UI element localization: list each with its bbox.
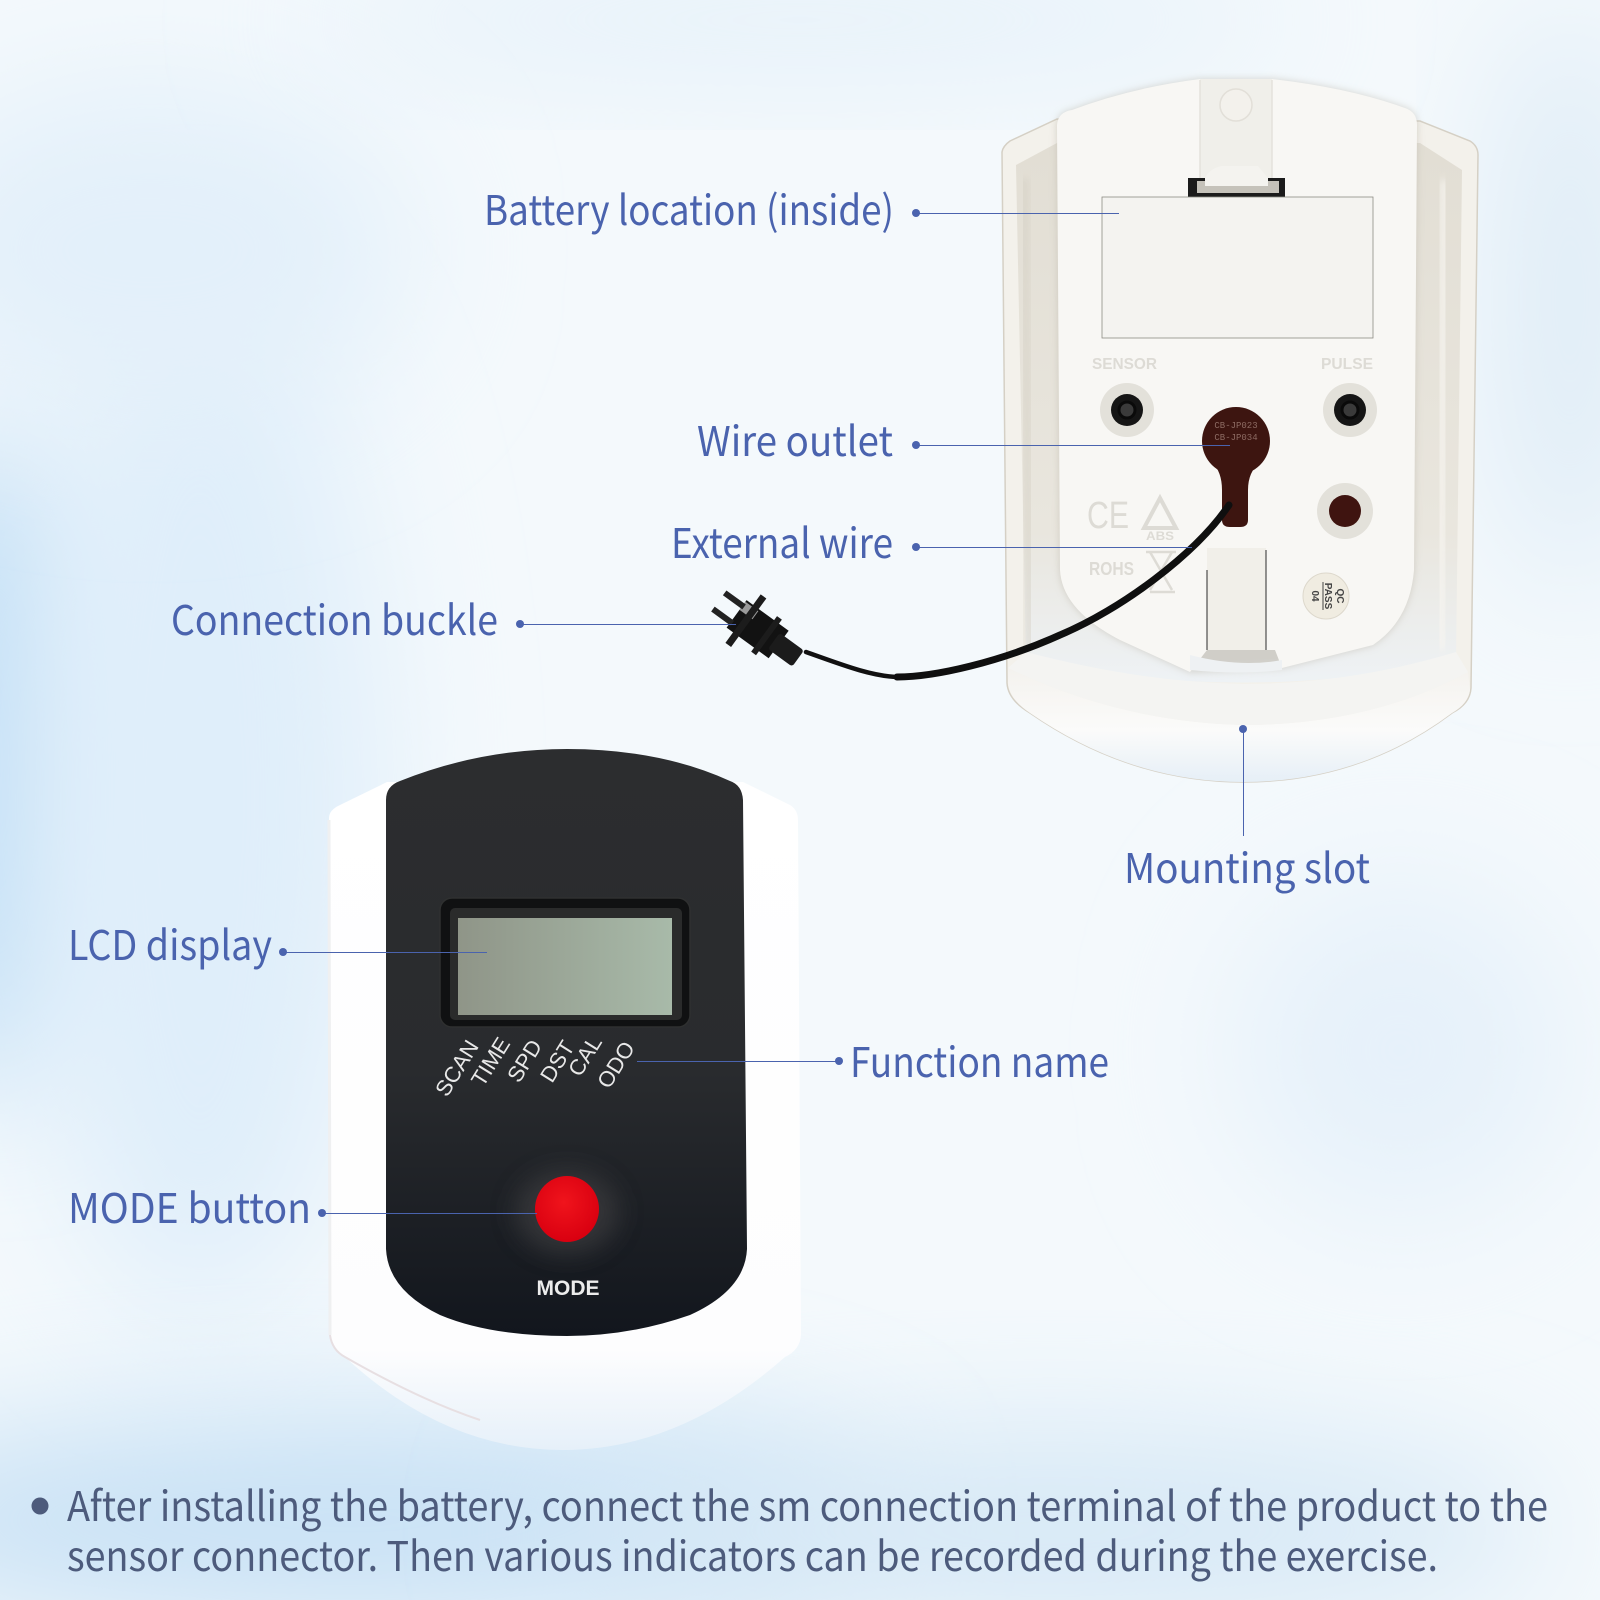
third hole [1317, 483, 1373, 539]
callout: external wire: External wire [671, 510, 893, 570]
external wire with connection buckle [701, 505, 1229, 683]
mounting notch [1190, 548, 1282, 672]
note: usage instructions [32, 1473, 1548, 1583]
callout: LCD display: LCD display [68, 912, 272, 972]
MODE button [515, 1170, 619, 1254]
QC pass sticker: QC [1334, 588, 1345, 604]
product: front view of the monitor [329, 749, 801, 1450]
callout: MODE button: MODE button [68, 1175, 311, 1235]
certification marks: ABS [1146, 529, 1174, 543]
callout: connection buckle [171, 587, 736, 647]
LCD bezel [440, 898, 690, 1027]
certification marks: ROHS [1089, 559, 1134, 579]
QC pass sticker: PASS [1322, 583, 1333, 610]
function names: DST [535, 1036, 580, 1087]
function names: SCAN [430, 1036, 484, 1101]
certification marks [1087, 495, 1176, 592]
wire outlet keyhole [1202, 407, 1270, 527]
rear tray housing [1002, 119, 1478, 782]
function names: SPD [502, 1035, 547, 1087]
callout: function name: Function name [850, 1029, 1109, 1089]
certification marks: CE [1087, 495, 1129, 537]
battery cover [1102, 197, 1373, 338]
connection buckle connector [701, 577, 816, 683]
callout: wire outlet [697, 408, 1230, 468]
callout: battery location: Battery location (inside) [484, 177, 894, 237]
QC pass sticker [1303, 573, 1349, 619]
pulse socket [1323, 383, 1377, 437]
callout: wire outlet: Wire outlet [697, 408, 893, 468]
QC pass sticker: 04 [1309, 590, 1320, 602]
socket labels: SENSOR [1092, 356, 1157, 373]
wire outlet keyhole: CB-JP034 [1214, 433, 1258, 443]
MODE caption: MODE [536, 1277, 600, 1300]
callout: function name [637, 1029, 1109, 1089]
wire outlet keyhole: CB-JP023 [1214, 421, 1258, 431]
function names: CAL [563, 1031, 607, 1081]
function names: TIME [466, 1033, 515, 1091]
socket labels [1092, 356, 1373, 373]
rear tray bottom lip [1008, 668, 1470, 782]
product: rear view of the monitor [1002, 79, 1478, 782]
sensor socket [1100, 383, 1154, 437]
black control panel [386, 749, 747, 1336]
back plate top slot channel [1188, 79, 1285, 197]
back plate shadow [1057, 79, 1417, 672]
function names: ODO [592, 1037, 640, 1093]
callout: connection buckle: Connection buckle [171, 587, 498, 647]
callout: mounting slot: Mounting slot [1124, 835, 1370, 895]
note: usage instructions: sensor connector. Then various indicators can be recorded during the exercise. [67, 1523, 1438, 1583]
callout: external wire [671, 510, 1192, 570]
function names [430, 1031, 640, 1101]
back plate [1057, 79, 1417, 672]
rear tray inner cavity [1016, 143, 1462, 682]
callout: LCD display [68, 912, 487, 972]
socket labels: PULSE [1321, 356, 1373, 373]
callout: MODE button [68, 1175, 537, 1235]
white front housing [329, 782, 801, 1450]
callout: mounting slot [1124, 725, 1370, 895]
LCD display screen [458, 918, 672, 1015]
